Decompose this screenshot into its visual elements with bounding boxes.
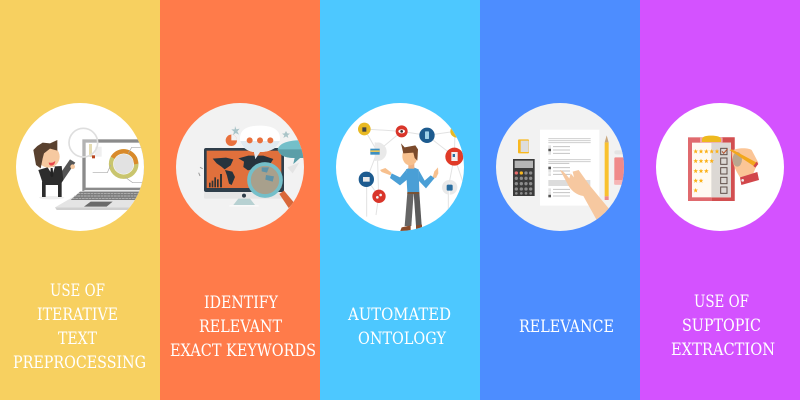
label: use of iterative text preprocessing: ITERATIVE bbox=[37, 305, 118, 324]
label: identify relevant exact keywords bbox=[170, 293, 316, 360]
panel: iterative text preprocessing bbox=[0, 0, 160, 400]
label: identify relevant exact keywords: RELEVANT bbox=[199, 317, 282, 336]
label: automated ontology: ONTOLOGY bbox=[358, 329, 447, 348]
label: relevance: RELEVANCE bbox=[519, 317, 614, 336]
label: automated ontology: AUTOMATED bbox=[347, 305, 451, 324]
label: use of suptopic extraction: EXTRACTION bbox=[671, 340, 775, 359]
panel: identify relevant exact keywords bbox=[160, 0, 320, 400]
label: use of iterative text preprocessing: PREPROCESSING bbox=[13, 353, 146, 372]
icon: man with connected network nodes bbox=[336, 103, 464, 232]
panel: use of subtopic extraction bbox=[640, 0, 800, 400]
label: use of iterative text preprocessing bbox=[13, 281, 146, 372]
label: use of iterative text preprocessing: USE OF bbox=[50, 281, 105, 300]
icon: monitor with world map and magnifier bbox=[176, 103, 307, 231]
label: use of suptopic extraction bbox=[671, 292, 775, 359]
label: identify relevant exact keywords: EXACT KEYWORDS bbox=[170, 341, 316, 360]
icon: businessman inspecting laptop bbox=[16, 103, 147, 231]
icon: exam sheet with hand, calculator and pencil bbox=[496, 103, 628, 231]
label: identify relevant exact keywords: IDENTIFY bbox=[204, 293, 279, 312]
label: use of suptopic extraction: SUPTOPIC bbox=[682, 316, 761, 335]
label: use of iterative text preprocessing: TEXT bbox=[58, 329, 97, 348]
panel: automated ontology bbox=[320, 0, 480, 400]
label: automated ontology bbox=[347, 305, 451, 348]
icon: clipboard rating checklist with hand bbox=[656, 103, 784, 231]
panel: relevance bbox=[480, 0, 640, 400]
label: use of suptopic extraction: USE OF bbox=[694, 292, 749, 311]
